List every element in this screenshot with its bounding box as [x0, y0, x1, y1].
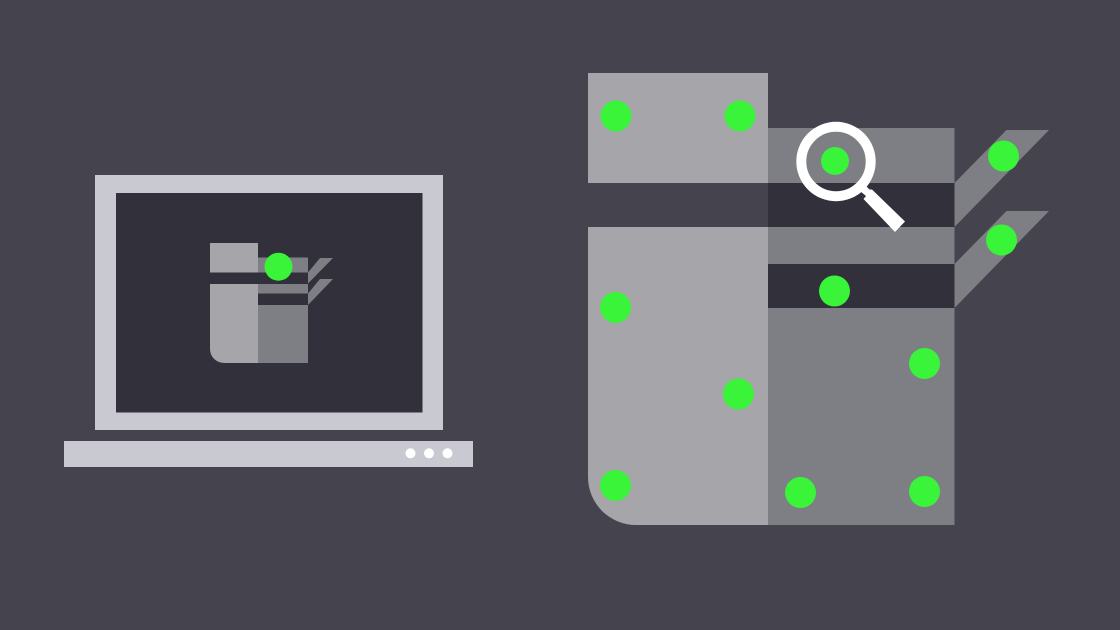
printer left body	[588, 73, 768, 525]
laptop indicator dots	[406, 448, 452, 458]
small printer green marker	[264, 253, 292, 281]
printer output trays	[954, 130, 1049, 308]
small printer right body	[258, 258, 308, 363]
small printer left body	[210, 243, 258, 363]
small printer on screen	[210, 243, 333, 363]
laptop base	[64, 441, 473, 467]
green markers	[600, 100, 1019, 508]
magnifier lens ring	[801, 127, 871, 196]
icon: magnifying glass	[801, 127, 905, 232]
printer dark slots	[768, 183, 954, 308]
laptop display	[116, 193, 422, 412]
laptop screen bezel	[95, 175, 443, 430]
small printer trays	[308, 258, 333, 305]
laptop	[64, 175, 473, 467]
printer right body	[768, 128, 954, 525]
large printer	[588, 73, 1049, 525]
magnifier handle	[860, 186, 905, 232]
